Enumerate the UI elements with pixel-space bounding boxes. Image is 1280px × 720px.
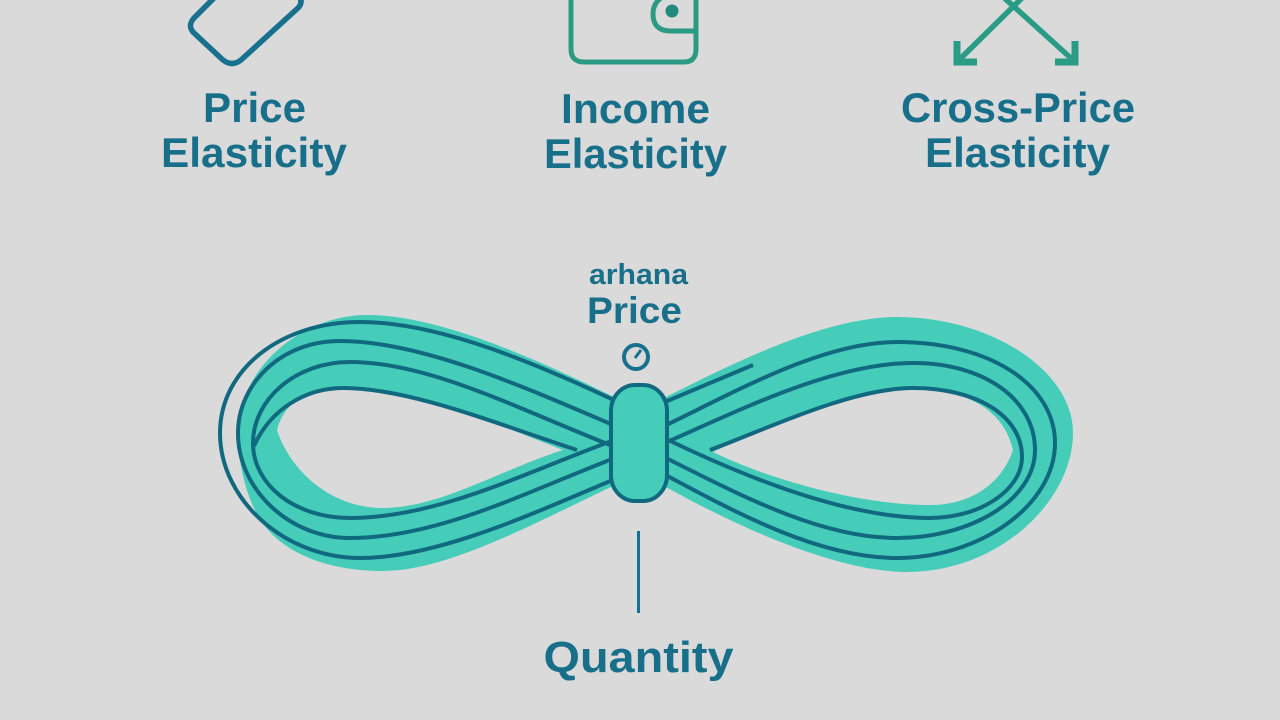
label: axis caption above price: arhana [589,259,689,291]
left loop strands [220,322,620,558]
right loop band [650,317,1073,572]
icon: crossing arrows [957,0,1075,62]
icon: gauge [624,345,648,369]
icon: wallet [571,0,696,62]
heading: cross-price elasticity [901,84,1135,176]
heading: cross-price elasticity: Cross-Price [901,84,1135,131]
heading: price elasticity: Price [203,84,306,131]
icon: price tag [190,0,301,64]
heading: price elasticity [161,84,348,176]
axis line [637,531,640,613]
heading: income elasticity [544,85,728,177]
heading: price elasticity: Elasticity [161,129,348,176]
heading: income elasticity: Income [561,85,710,132]
center knot [611,385,667,501]
label: quantity axis: Quantity [544,633,734,682]
left loop band [238,315,630,571]
label: price axis: Price [587,290,682,331]
infinity loop diagram [220,315,1073,572]
heading: cross-price elasticity: Elasticity [925,129,1111,176]
right loop strands [660,342,1055,558]
heading: income elasticity: Elasticity [544,130,728,177]
